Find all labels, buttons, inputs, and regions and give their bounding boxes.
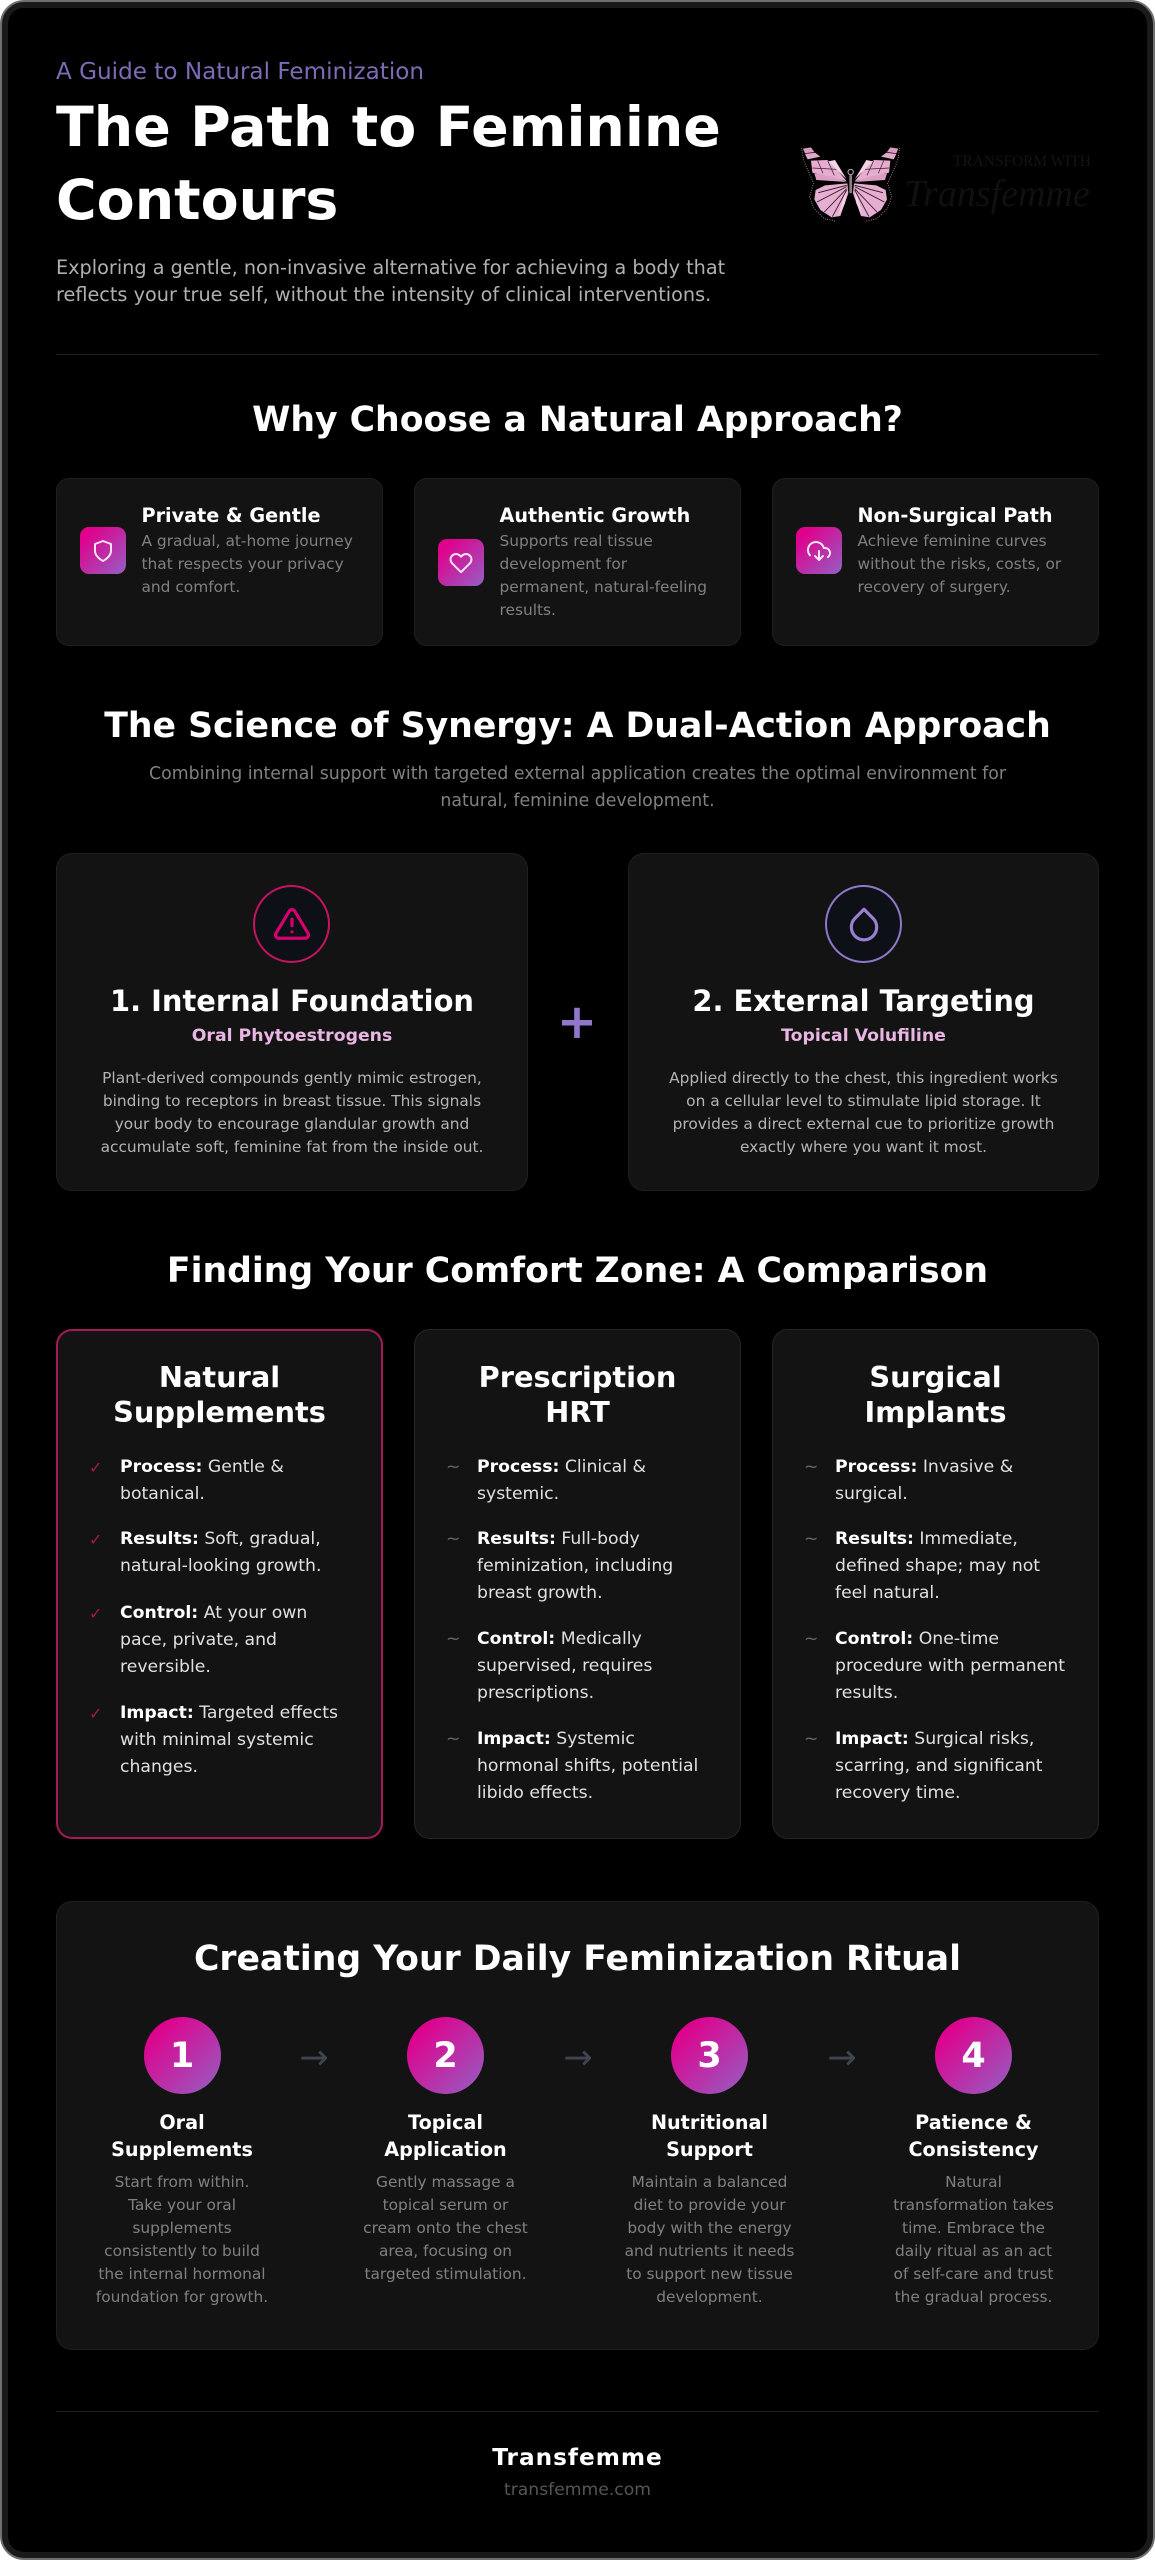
step title	[908, 2111, 1039, 2160]
heading: comparison: Finding Your Comfort Zone: A Comparison	[167, 1251, 988, 1291]
list item: process: systemic.	[477, 1484, 559, 1504]
number badge: 3	[697, 2036, 722, 2076]
panel: natural supplements: ✓	[89, 1458, 102, 1476]
list item: impact: with minimal systemic	[120, 1730, 314, 1750]
number badge	[407, 2017, 484, 2094]
step title	[651, 2111, 768, 2160]
step text: the gradual process.	[895, 2288, 1052, 2306]
panel: surgical implants: ~	[804, 1729, 818, 1749]
step 4	[893, 2017, 1054, 2306]
card text: Plant-derived compounds gently mimic estrogen,	[102, 1069, 482, 1087]
list item: process: botanical.	[120, 1484, 205, 1504]
list item: results: Results: Full-body	[477, 1529, 640, 1549]
step text	[625, 2173, 794, 2306]
step text: development.	[656, 2288, 763, 2306]
step 3	[625, 2017, 794, 2306]
panel: natural supplements: ✓	[89, 1530, 102, 1549]
column title: HRT	[545, 1394, 610, 1428]
heading: daily ritual: Creating Your Daily Feminization Ritual	[194, 1939, 961, 1979]
list item: impact: Impact: Systemic	[477, 1729, 635, 1749]
card title: Private & Gentle	[142, 504, 321, 527]
panel: prescription HRT: ~	[446, 1628, 460, 1648]
card text: recovery of surgery.	[858, 578, 1011, 596]
step text: time. Embrace the	[902, 2219, 1045, 2237]
card text	[500, 532, 707, 619]
icon: droplet	[825, 885, 902, 963]
card title: 1. Internal Foundation	[110, 984, 474, 1018]
arrow: →	[827, 2038, 857, 2078]
step title: Nutritional	[651, 2111, 768, 2134]
step text: Maintain a balanced	[632, 2173, 787, 2191]
step text: targeted stimulation.	[364, 2265, 527, 2283]
list item: control: results.	[835, 1682, 898, 1702]
number badge	[935, 2017, 1012, 2094]
step text: Natural	[945, 2173, 1002, 2191]
card text: accumulate soft, feminine fat from the inside out.	[101, 1138, 483, 1156]
column title	[113, 1360, 326, 1428]
step title	[111, 2111, 253, 2160]
step text: and nutrients it needs	[625, 2242, 794, 2260]
step text: foundation for growth.	[96, 2288, 268, 2306]
section intro: natural, feminine development.	[440, 791, 715, 811]
number badge	[144, 2017, 220, 2094]
list item: process: Process: Invasive &	[835, 1456, 1013, 1476]
card text: without the risks, costs, or	[858, 555, 1061, 573]
icon: heart	[438, 539, 484, 586]
step text: topical serum or	[383, 2196, 508, 2214]
step text	[893, 2173, 1054, 2306]
list item: control: Control: Medically	[477, 1628, 642, 1648]
card text: Supports real tissue	[500, 532, 653, 550]
step text: Take your oral	[128, 2196, 236, 2214]
step text: to support new tissue	[626, 2265, 793, 2283]
panel: authentic growth	[414, 478, 741, 646]
list item: results	[804, 1529, 1040, 1603]
title: Contours	[56, 169, 338, 233]
list item: process: surgical.	[835, 1484, 908, 1504]
panel: natural supplements	[56, 1329, 383, 1839]
number badge	[671, 2017, 748, 2094]
card text: that respects your privacy	[142, 555, 344, 573]
list item: process	[804, 1456, 1013, 1504]
step text: transformation takes	[893, 2196, 1054, 2214]
panel: prescription HRT: ~	[446, 1456, 460, 1476]
list item: impact	[446, 1729, 698, 1803]
list item: impact: libido effects.	[477, 1783, 593, 1803]
column title: Supplements	[113, 1394, 326, 1428]
card title: 2. External Targeting	[692, 984, 1035, 1018]
card text: Applied directly to the chest, this ingredient works	[669, 1069, 1058, 1087]
card subtitle: Topical Volufiline	[781, 1026, 946, 1046]
step text: supplements	[132, 2219, 232, 2237]
list item: results	[446, 1529, 673, 1603]
footer brand: Transfemme	[492, 2444, 663, 2471]
card text: exactly where you want it most.	[740, 1138, 987, 1156]
card text: your body to encourage glandular growth and	[115, 1115, 469, 1133]
step text: the internal hormonal	[98, 2265, 266, 2283]
step title: Support	[666, 2138, 753, 2160]
card text: permanent, natural-feeling	[500, 578, 707, 596]
arrow: →	[299, 2038, 329, 2078]
panel: daily ritual	[56, 1901, 1099, 2350]
title	[56, 96, 721, 233]
card text: and comfort.	[142, 578, 240, 596]
panel: prescription HRT: ~	[446, 1729, 460, 1749]
step text: cream onto the chest	[363, 2219, 528, 2237]
card text: results.	[500, 601, 556, 619]
column title: Prescription	[479, 1360, 676, 1394]
panel: prescription HRT	[414, 1329, 741, 1839]
list item: control: prescriptions.	[477, 1682, 594, 1702]
step title: Consistency	[908, 2138, 1039, 2160]
column title	[479, 1360, 676, 1428]
step text: daily ritual as an act	[895, 2242, 1052, 2260]
step text: of self-care and trust	[894, 2265, 1053, 2283]
list item: control: reversible.	[120, 1656, 211, 1676]
column title: Implants	[864, 1394, 1007, 1428]
panel: surgical implants: ~	[804, 1628, 818, 1648]
column title: Natural	[159, 1360, 280, 1394]
footer url: transfemme.com	[504, 2480, 651, 2500]
list item: control	[804, 1628, 1065, 1702]
step text: Start from within.	[115, 2173, 249, 2191]
list item: impact: changes.	[120, 1757, 198, 1777]
list item: control: Control: At your own	[120, 1602, 307, 1622]
list item: impact: Impact: Targeted effects	[120, 1703, 338, 1723]
panel: natural supplements: ✓	[89, 1704, 102, 1723]
intro text: Exploring a gentle, non-invasive alternative for achieving a body that	[56, 256, 725, 279]
list item: process	[89, 1456, 284, 1504]
step text: Gently massage a	[376, 2173, 515, 2191]
list item: process: Process: Gentle &	[120, 1456, 284, 1476]
list item: results: feel natural.	[835, 1583, 940, 1603]
list item: impact	[804, 1729, 1043, 1803]
panel: private and gentle	[56, 478, 383, 646]
icon: shield	[80, 527, 126, 574]
column title	[864, 1360, 1007, 1428]
list item: control	[89, 1602, 307, 1676]
plus sign: +	[557, 994, 597, 1050]
column title: Surgical	[869, 1360, 1002, 1394]
step title: Patience &	[915, 2111, 1032, 2134]
arrow: →	[563, 2038, 593, 2078]
logo wordmark: Transfemme	[904, 173, 1090, 215]
logo tagline: TRANSFORM WITH	[953, 153, 1091, 170]
intro text	[56, 256, 725, 306]
card text	[142, 532, 353, 596]
number badge: 1	[170, 2036, 194, 2076]
section intro: Combining internal support with targeted external application creates the optimal environment for	[149, 764, 1006, 784]
step text: diet to provide your	[633, 2196, 786, 2214]
step 1	[96, 2017, 268, 2306]
panel: surgical implants: ~	[804, 1456, 818, 1476]
list item: process	[446, 1456, 646, 1504]
number badge: 2	[433, 2036, 458, 2076]
step text	[363, 2173, 528, 2283]
step title: Application	[384, 2138, 507, 2160]
step text	[96, 2173, 268, 2306]
list item: results: natural-looking growth.	[120, 1556, 321, 1576]
eyebrow: A Guide to Natural Feminization	[56, 59, 424, 85]
card subtitle: Oral Phytoestrogens	[192, 1026, 392, 1046]
heading: why natural: Why Choose a Natural Approach?	[252, 400, 903, 440]
list item: control	[446, 1628, 652, 1702]
card text: development for	[500, 555, 627, 573]
list item: results: Results: Immediate,	[835, 1529, 1018, 1549]
list item: results: feminization, including	[477, 1556, 673, 1576]
card text: Achieve feminine curves	[858, 532, 1047, 550]
list item: results: Results: Soft, gradual,	[120, 1529, 321, 1549]
card text	[101, 1069, 483, 1156]
card title: Authentic Growth	[500, 504, 690, 527]
list item: impact: recovery time.	[835, 1783, 960, 1803]
number badge: 4	[961, 2036, 986, 2076]
card text: binding to receptors in breast tissue. This signals	[103, 1092, 481, 1110]
list item: impact	[89, 1703, 338, 1777]
panel: prescription HRT: ~	[446, 1529, 460, 1549]
step text: area, focusing on	[379, 2242, 512, 2260]
list item: impact: Impact: Surgical risks,	[835, 1729, 1034, 1749]
card text: A gradual, at-home journey	[142, 532, 353, 550]
icon: alert triangle	[253, 885, 330, 963]
logo	[801, 147, 1091, 222]
list item: control: pace, private, and	[120, 1630, 277, 1650]
section intro	[149, 764, 1006, 811]
list item: results: breast growth.	[477, 1583, 603, 1603]
card text	[669, 1069, 1058, 1156]
list item: results	[89, 1529, 321, 1576]
panel: natural supplements: ✓	[89, 1604, 102, 1622]
panel: internal foundation	[56, 853, 528, 1191]
list item: control: procedure with permanent	[835, 1656, 1065, 1676]
heading: science of synergy: The Science of Synergy: A Dual-Action Approach	[104, 706, 1051, 746]
list item: impact: hormonal shifts, potential	[477, 1756, 698, 1776]
step text: consistently to build	[104, 2242, 260, 2260]
card text: on a cellular level to stimulate lipid storage. It	[686, 1092, 1041, 1110]
panel: external targeting	[628, 853, 1099, 1191]
icon: butterfly	[801, 147, 900, 222]
card title: Non-Surgical Path	[858, 504, 1053, 527]
list item: control: Control: One-time	[835, 1628, 999, 1648]
panel: surgical implants	[772, 1329, 1099, 1839]
intro text: reflects your true self, without the intensity of clinical interventions.	[56, 282, 711, 306]
card text: provides a direct external cue to prioritize growth	[673, 1115, 1054, 1133]
list item: process: Process: Clinical &	[477, 1456, 646, 1476]
step title: Oral	[159, 2111, 205, 2134]
list item: results: defined shape; may not	[835, 1556, 1040, 1576]
title: The Path to Feminine	[56, 96, 721, 160]
icon: cloud download	[796, 527, 842, 574]
step title	[384, 2111, 507, 2160]
step title: Supplements	[111, 2138, 253, 2160]
step title: Topical	[408, 2111, 483, 2134]
list item: control: supervised, requires	[477, 1656, 652, 1676]
step text: body with the energy	[627, 2219, 792, 2237]
step 2	[363, 2017, 528, 2283]
panel: surgical implants: ~	[804, 1529, 818, 1549]
card text	[858, 532, 1062, 596]
list item: impact: scarring, and significant	[835, 1756, 1043, 1776]
panel: non-surgical path	[772, 478, 1099, 646]
